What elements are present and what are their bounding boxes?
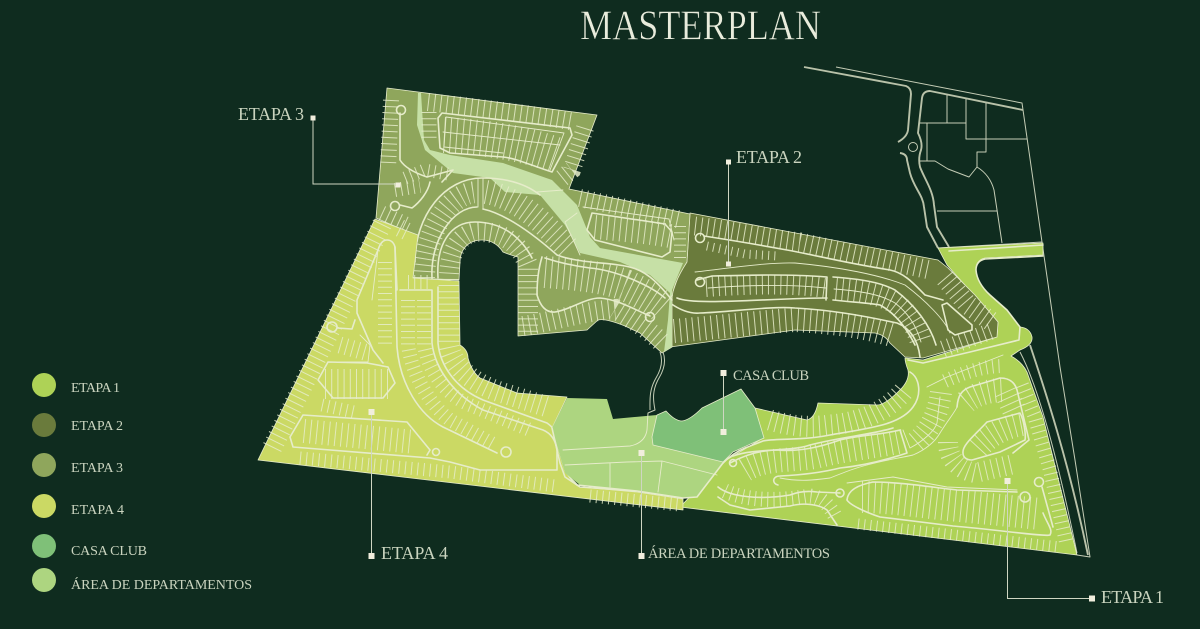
map area: Área de Departamentos: [552, 398, 723, 498]
map area: Etapa 3: [376, 88, 690, 353]
map area: Casa Club: [652, 389, 764, 462]
boulevard: [417, 93, 683, 352]
legend item: Etapa 1: ETAPA 1: [71, 381, 120, 396]
lake connector road: [648, 352, 665, 413]
legend: [32, 373, 252, 593]
callout: Etapa 3: ETAPA 3: [238, 104, 304, 124]
title: MASTERPLAN: [580, 4, 821, 50]
map area: Etapa 2: [670, 213, 998, 358]
callout: Etapa 4: [368, 409, 448, 563]
legend item: Área de Departamentos: [32, 568, 252, 593]
legend item: Etapa 2: ETAPA 2: [71, 419, 123, 434]
map area: Etapa 4: [258, 219, 683, 510]
callout: Etapa 3: [238, 104, 400, 188]
callout: Casa Club: CASA CLUB: [733, 368, 809, 384]
callout: Área de Departamentos: [638, 450, 830, 562]
legend item: Etapa 3: ETAPA 3: [71, 461, 123, 476]
legend item: Etapa 3: [32, 453, 123, 477]
map area: Etapa 1: [680, 243, 1077, 555]
legend item: Etapa 4: [32, 494, 124, 518]
callout: Etapa 2: [726, 147, 802, 266]
callout: Etapa 1: [1004, 478, 1164, 607]
outer roads and north-east parcels: [804, 67, 1090, 557]
callout: Etapa 1: ETAPA 1: [1101, 587, 1164, 607]
legend item: Casa Club: [32, 534, 147, 559]
legend item: Etapa 1: [32, 373, 120, 397]
legend item: Etapa 4: ETAPA 4: [71, 503, 124, 518]
legend item: Casa Club: CASA CLUB: [71, 544, 147, 559]
callout: Etapa 2: ETAPA 2: [736, 147, 802, 167]
callout: Etapa 4: ETAPA 4: [381, 543, 448, 563]
legend item: Etapa 2: [32, 413, 123, 437]
callout: Casa Club: [720, 368, 809, 435]
legend item: Área de Departamentos: ÁREA DE DEPARTAMENTOS: [71, 576, 252, 593]
callout: Área de Departamentos: ÁREA DE DEPARTAMENTOS: [648, 545, 830, 562]
